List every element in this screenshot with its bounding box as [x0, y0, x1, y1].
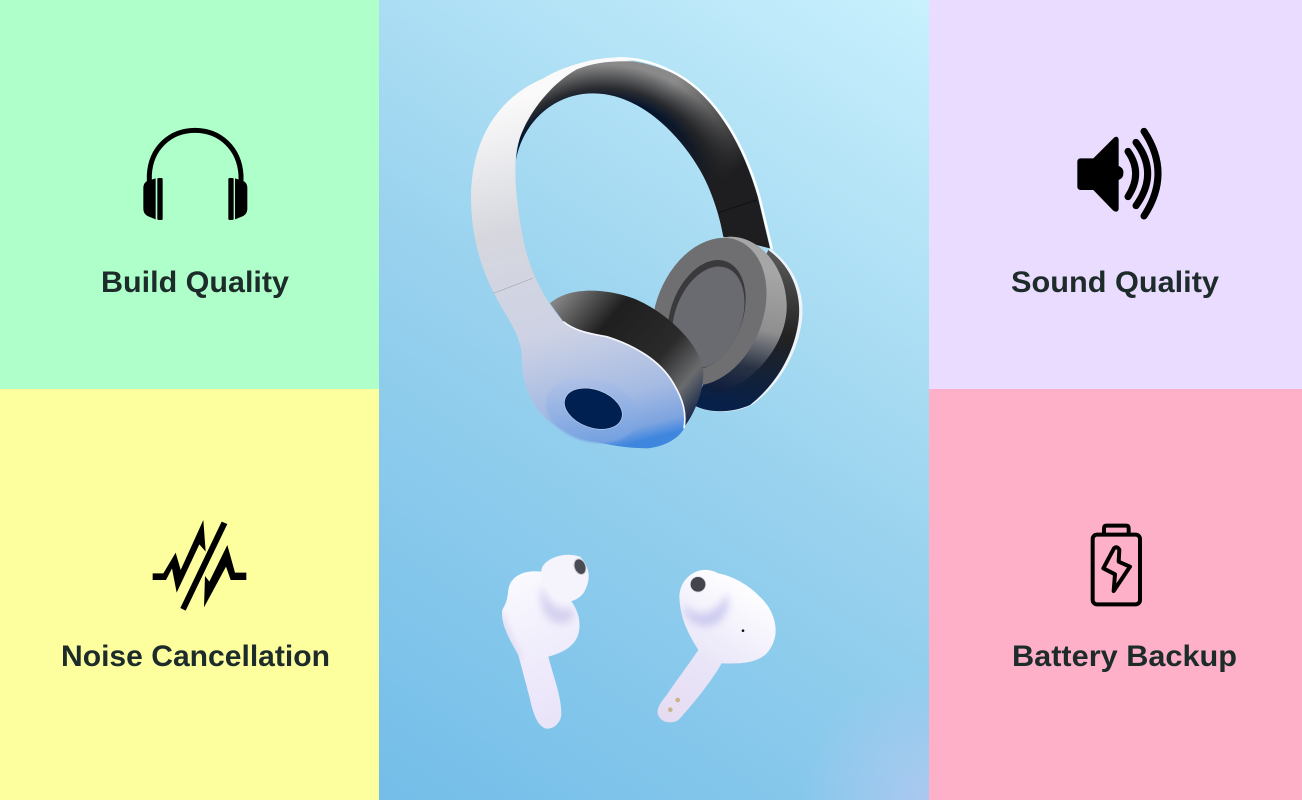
icon: noise waveform: [153, 520, 246, 611]
illustration: over-ear headphones: [471, 57, 803, 453]
heading: battery backup: Battery Backup: [1012, 640, 1237, 673]
panel: noise cancellation: [0, 389, 379, 800]
panel: battery backup: [929, 389, 1302, 800]
icon: battery with bolt: [1093, 526, 1140, 604]
illustration: left earbud: [498, 555, 589, 729]
panel: build quality: [0, 0, 379, 389]
illustration: right earbud: [658, 570, 776, 722]
icon: speaker: [1077, 131, 1158, 216]
heading: build quality: Build Quality: [101, 266, 289, 299]
panel: sound quality: [929, 0, 1302, 389]
heading: noise cancellation: Noise Cancellation: [61, 640, 330, 673]
icon: headphones: [143, 130, 247, 220]
panel: center product photo: [379, 0, 929, 800]
heading: sound quality: Sound Quality: [1011, 266, 1219, 299]
